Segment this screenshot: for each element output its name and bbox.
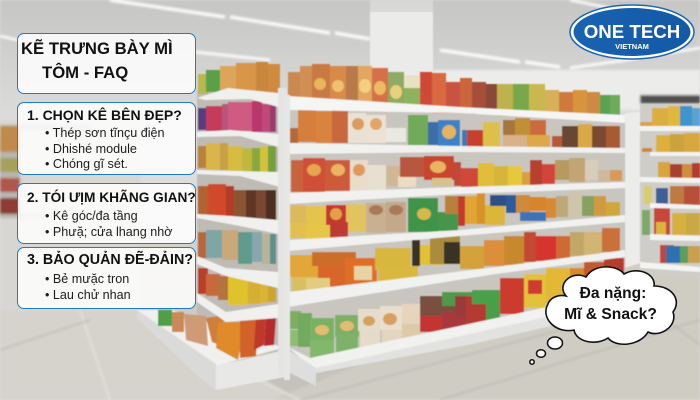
question 1 bullet 2: • Dhishé module: [45, 142, 137, 156]
left unit shelves: [197, 88, 280, 322]
question 3 heading: 3. BẢO QUẢN ĐẼ-ĐẢIN?: [27, 252, 193, 268]
centre unit top shelf products: [288, 64, 620, 122]
centre unit fourth shelf products: [290, 192, 620, 239]
centre unit second shelf products: [290, 110, 620, 149]
question 1 bullet 1: • Thép sơn tĩnçu điện: [45, 126, 165, 140]
left unit base: [137, 310, 283, 366]
panel: question 1: [17, 102, 196, 175]
question 2 bullet 1: • Kê góc/đa tầng: [45, 209, 138, 223]
left shelf unit: [137, 62, 287, 390]
logo: One Tech Vietnam: VIETNAM: [615, 42, 649, 51]
panel: question 2: [17, 183, 196, 244]
title box: [17, 33, 196, 94]
question 2 heading: 2. TÓI ƯỊM KHÃNG GIAN?: [27, 190, 196, 205]
background: distant store shelves: [0, 125, 90, 218]
panel: question 3: [17, 247, 196, 309]
thought dots: [530, 337, 562, 364]
centre unit base and uprights: [288, 350, 316, 386]
left unit back panel: [197, 88, 283, 362]
cloud text line 1: Đa nặng:: [580, 285, 646, 302]
cloud text line 2: Mĩ & Snack?: [564, 306, 657, 323]
cloud shape: [546, 267, 676, 344]
question 1 heading: 1. CHỌN KÊ BÊN ĐẸP?: [27, 107, 182, 123]
logo: One Tech Vietnam: ONE TECH: [584, 21, 680, 42]
centre unit third shelf products: [291, 156, 622, 192]
centre unit fifth shelf products: [290, 228, 620, 297]
centre unit shelves: [288, 96, 625, 372]
logo: One Tech Vietnam: [569, 4, 695, 60]
question 3 bullet 2: • Lau chử nhan: [45, 288, 131, 302]
question 2 bullet 2: • Phưặ; cửa lhang nhờ: [45, 225, 173, 239]
right shelf unit: [625, 104, 700, 276]
centre unit bottom shelf products: [289, 258, 624, 358]
centre unit back panel: [288, 95, 625, 372]
left unit products: [158, 62, 280, 360]
callout: thought bubble: [529, 266, 678, 365]
centre shelf unit: [284, 64, 625, 386]
pillar: [370, 0, 433, 76]
question 3 bullet 1: • Bẻ mưặc tron: [45, 272, 129, 286]
question 1 bullet 3: • Chóng gĩ sét.: [45, 157, 128, 171]
title line 1: KẼ TRƯNG BÀY MÌ: [21, 39, 173, 58]
title line 2: TÔM - FAQ: [42, 63, 128, 82]
